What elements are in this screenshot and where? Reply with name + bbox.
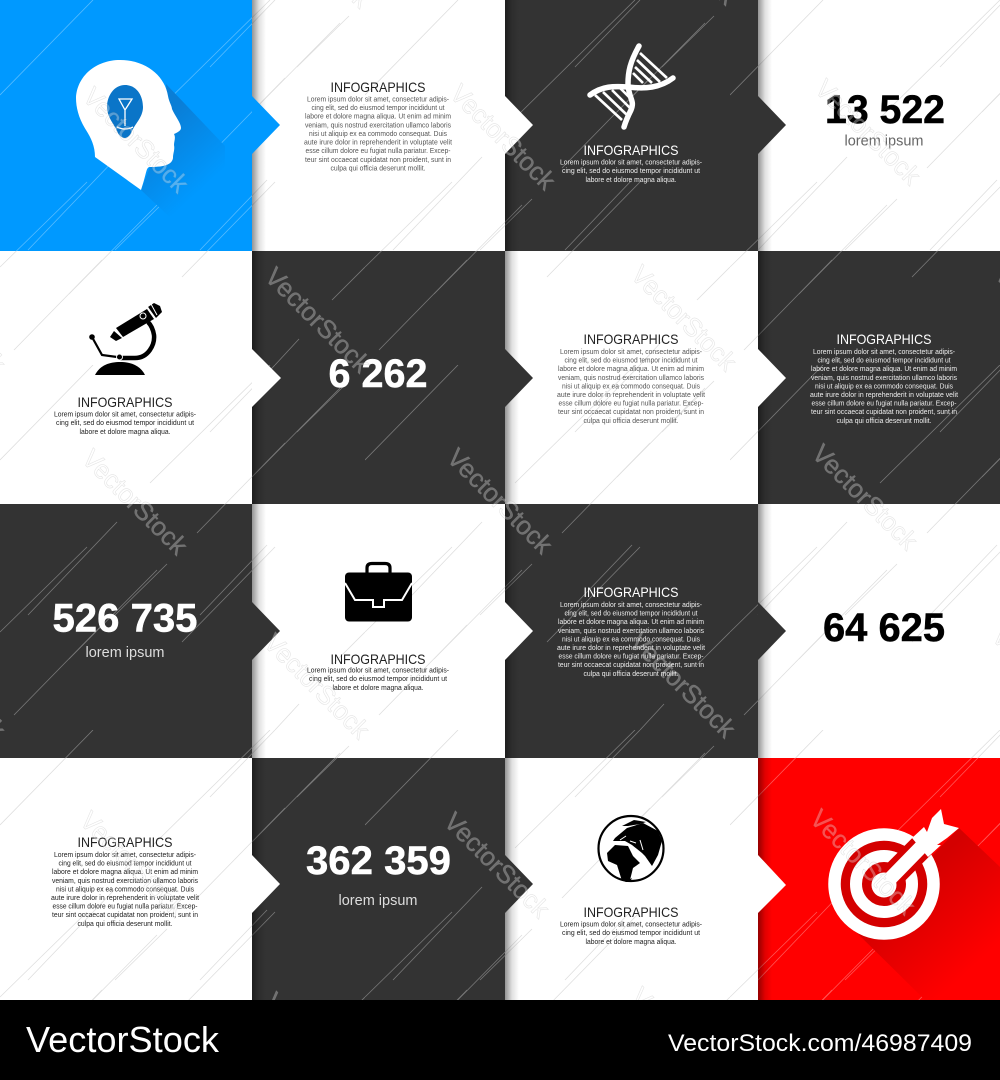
- text block: row three column three: Lorem ipsum dolor sit amet, consectetur adipis-: [560, 600, 702, 609]
- text block: row two column three: [557, 331, 706, 425]
- text block: row four column one: INFOGRAPHICS: [78, 834, 172, 850]
- text block: row four column one: culpa qui officia deserunt mollit.: [78, 919, 172, 928]
- text block: row one column three: [560, 142, 702, 184]
- text block: row two column four: veniam, quis nostrud exercitation ullamco laboris: [811, 373, 957, 382]
- icon: briefcase: [345, 564, 412, 622]
- text block: row four column three: labore et dolore magna aliqua.: [586, 937, 676, 946]
- icon: head with light bulb: [76, 60, 225, 222]
- stat: 64 625: 64 625: [823, 606, 945, 650]
- text block: row three column two: labore et dolore magna aliqua.: [332, 683, 424, 692]
- text block: row two column three: Lorem ipsum dolor sit amet, consectetur adipis-: [560, 347, 702, 356]
- footer bar: [0, 1000, 1000, 1080]
- panel: dark number 362 359 cell: [252, 758, 505, 1000]
- watermarks: VectorStock: [258, 627, 376, 745]
- arrow: white row four first: [252, 855, 280, 913]
- text block: row two column four: Lorem ipsum dolor sit amet, consectetur adipis-: [813, 347, 955, 356]
- text block: row four column one: teur sint occaecat cupidatat non proident, sunt in: [52, 910, 198, 919]
- text block: row three column three: teur sint occaecat cupidatat non proident, sunt in: [558, 660, 704, 669]
- icon: DNA helix: [590, 46, 673, 127]
- text block: row two column four: esse cillum dolore eu fugiat nulla pariatur. Excep-: [812, 399, 957, 408]
- text block: row two column four: INFOGRAPHICS: [836, 331, 932, 347]
- stat: 6 262: 6 262: [328, 352, 428, 396]
- text block: row three column three: labore et dolore magna aliqua. Ut enim ad minim: [558, 617, 704, 626]
- text block: row two column one: INFOGRAPHICS: [78, 394, 172, 410]
- text block: row one column two: esse cillum dolore eu fugiat nulla pariatur. Excep-: [306, 146, 451, 155]
- text block: row one column three: Lorem ipsum dolor sit amet, consectetur adipis-: [560, 158, 702, 166]
- text block: row three column three: nisi ut aliquip ex ea commodo consequat. Duis: [562, 634, 700, 643]
- arrow: white row one: [505, 96, 533, 154]
- text block: row two column four: culpa qui officia deserunt mollit.: [836, 416, 932, 425]
- text block: row three column three: veniam, quis nostrud exercitation ullamco laboris: [558, 626, 704, 635]
- text block: row four column three: Lorem ipsum dolor sit amet, consectetur adipis-: [560, 920, 702, 928]
- text block: row one column two: veniam, quis nostrud exercitation ullamco laboris: [305, 120, 451, 129]
- panel: red target cell: [758, 758, 1000, 1000]
- text block: row one column two: [304, 79, 453, 172]
- watermarks: VectorStock: [804, 803, 922, 921]
- text block: row two column three: labore et dolore magna aliqua. Ut enim ad minim: [558, 364, 704, 373]
- footer image id: VectorStock.com/46987409: [668, 1030, 972, 1057]
- panel: dark number 526 735 cell: [0, 504, 252, 758]
- text block: row four column three: cing elit, sed do eiusmod tempor incididunt ut: [562, 928, 701, 937]
- panel: dark text cell row three: [505, 504, 758, 758]
- icon: target with arrow: [834, 809, 1000, 1000]
- text block: row three column two: [307, 651, 449, 692]
- text block: row three column three: aute irure dolor in reprehenderit in voluptate velit: [557, 643, 706, 652]
- panel: blue head cell: [0, 0, 252, 251]
- text block: row four column one: [51, 834, 200, 928]
- text block: row four column one: nisi ut aliquip ex ea commodo consequat. Duis: [56, 884, 194, 893]
- text block: row two column four: teur sint occaecat cupidatat non proident, sunt in: [811, 407, 957, 416]
- watermarks: VectorStock: [76, 443, 194, 561]
- stat: 13 522: lorem ipsum: [845, 134, 923, 150]
- arrow: dark row two: [505, 349, 533, 407]
- stat: 526 735: 526 735: [52, 596, 198, 640]
- stat: 526 735: [52, 596, 198, 661]
- text block: row three column two: Lorem ipsum dolor sit amet, consectetur adipis-: [307, 666, 449, 674]
- panel: dark text cell row two: [758, 251, 1000, 504]
- watermarks: VectorStock: [441, 442, 559, 560]
- panel: dark number 6 262 cell: [252, 251, 505, 504]
- text block: row one column two: Lorem ipsum dolor sit amet, consectetur adipis-: [307, 94, 449, 104]
- column edge shadows: [252, 0, 772, 1000]
- text block: row one column three: cing elit, sed do eiusmod tempor incididunt ut: [562, 166, 701, 175]
- text block: row three column three: INFOGRAPHICS: [584, 584, 678, 600]
- arrow: dark row four: [505, 855, 533, 913]
- arrow: white row four last: [758, 855, 786, 913]
- watermarks: VectorStock: [438, 806, 556, 924]
- footer logo: VectorStock: [26, 1019, 220, 1060]
- arrow: white row three: [505, 602, 533, 660]
- watermarks: VectorStock: [259, 261, 377, 379]
- text block: row one column three: labore et dolore magna aliqua.: [586, 175, 676, 184]
- arrow: dark row three first: [252, 602, 280, 660]
- text block: row three column three: [557, 584, 706, 678]
- arrow: white row two first: [252, 349, 281, 407]
- stat: 526 735: lorem ipsum: [86, 645, 164, 661]
- stat: 362 359: lorem ipsum: [339, 893, 417, 909]
- text block: row four column three: INFOGRAPHICS: [584, 904, 678, 920]
- text block: row three column three: esse cillum dolore eu fugiat nulla pariatur. Excep-: [558, 652, 704, 661]
- text block: row four column one: aute irure dolor in reprehenderit in voluptate velit: [51, 893, 200, 902]
- text block: row one column two: labore et dolore magna aliqua. Ut enim ad minim: [305, 112, 451, 121]
- stat: 362 359: [306, 839, 451, 909]
- text block: row one column two: cing elit, sed do eiusmod tempor incididunt ut: [312, 103, 445, 112]
- watermarks: VectorStock: [77, 81, 195, 199]
- text block: row one column two: aute irure dolor in reprehenderit in voluptate velit: [304, 138, 453, 147]
- text block: row two column three: INFOGRAPHICS: [584, 331, 678, 347]
- arrows between cells: [252, 96, 786, 913]
- text block: row three column three: culpa qui officia deserunt mollit.: [584, 669, 678, 678]
- text block: row two column four: nisi ut aliquip ex ea commodo consequat. Duis: [815, 381, 953, 390]
- arrow: dark row one: [758, 96, 786, 154]
- text block: row two column one: labore et dolore magna aliqua.: [80, 427, 170, 436]
- text block: row one column three: INFOGRAPHICS: [584, 142, 678, 158]
- arrow: dark row three last: [758, 602, 786, 660]
- text block: row two column one: cing elit, sed do eiusmod tempor incididunt ut: [56, 418, 195, 427]
- text block: row one column two: teur sint occaecat cupidatat non proident, sunt in: [305, 155, 451, 164]
- text block: row two column four: [810, 331, 959, 425]
- text block: row two column four: cing elit, sed do eiusmod tempor incididunt ut: [818, 356, 951, 365]
- stat: 362 359: 362 359: [306, 839, 451, 883]
- text block: row two column three: nisi ut aliquip ex ea commodo consequat. Duis: [562, 381, 700, 390]
- text block: row one column two: INFOGRAPHICS: [330, 79, 426, 95]
- text block: row three column three: cing elit, sed do eiusmod tempor incididunt ut: [564, 609, 698, 618]
- watermarks: VectorStock: [809, 73, 927, 191]
- text block: row two column one: [54, 394, 196, 436]
- text block: row two column four: aute irure dolor in reprehenderit in voluptate velit: [810, 390, 959, 399]
- text block: row four column three: [560, 904, 702, 946]
- text block: row two column three: aute irure dolor in reprehenderit in voluptate velit: [557, 390, 706, 399]
- panel: dark DNA cell: [505, 0, 758, 251]
- text block: row two column four: labore et dolore magna aliqua. Ut enim ad minim: [811, 364, 957, 373]
- text block: row two column three: culpa qui officia deserunt mollit.: [584, 416, 678, 425]
- text block: row four column one: Lorem ipsum dolor sit amet, consectetur adipis-: [54, 850, 196, 859]
- text block: row two column three: teur sint occaecat cupidatat non proident, sunt in: [558, 407, 704, 416]
- text block: row two column three: veniam, quis nostrud exercitation ullamco laboris: [558, 373, 704, 382]
- icon: microscope: [89, 303, 162, 375]
- text block: row two column three: cing elit, sed do eiusmod tempor incididunt ut: [564, 356, 698, 365]
- text block: row one column two: nisi ut aliquip ex ea commodo consequat. Duis: [309, 129, 447, 138]
- text block: row four column one: esse cillum dolore eu fugiat nulla pariatur. Excep-: [52, 902, 198, 911]
- text block: row four column one: labore et dolore magna aliqua. Ut enim ad minim: [52, 867, 198, 876]
- text block: row three column two: cing elit, sed do eiusmod tempor incididunt ut: [309, 674, 448, 683]
- watermarks: VectorStock: [624, 626, 742, 744]
- text block: row four column one: veniam, quis nostrud exercitation ullamco laboris: [52, 876, 198, 885]
- watermarks: VectorStock: [444, 78, 562, 196]
- icon: globe: [598, 816, 664, 882]
- text block: row four column one: cing elit, sed do eiusmod tempor incididunt ut: [58, 859, 192, 868]
- text block: row three column two: INFOGRAPHICS: [330, 651, 426, 667]
- text block: row two column one: Lorem ipsum dolor sit amet, consectetur adipis-: [54, 410, 196, 418]
- watermarks: VectorStock: [806, 438, 924, 556]
- watermarks: VectorStock: [625, 259, 743, 377]
- stat: 13 522: 13 522: [825, 88, 945, 132]
- text block: row two column three: esse cillum dolore eu fugiat nulla pariatur. Excep-: [558, 399, 704, 408]
- arrow: white row two last: [758, 349, 786, 407]
- watermarks: VectorStock: [74, 805, 192, 923]
- text block: row one column two: culpa qui officia deserunt mollit.: [330, 163, 426, 172]
- arrow: blue: [252, 96, 280, 154]
